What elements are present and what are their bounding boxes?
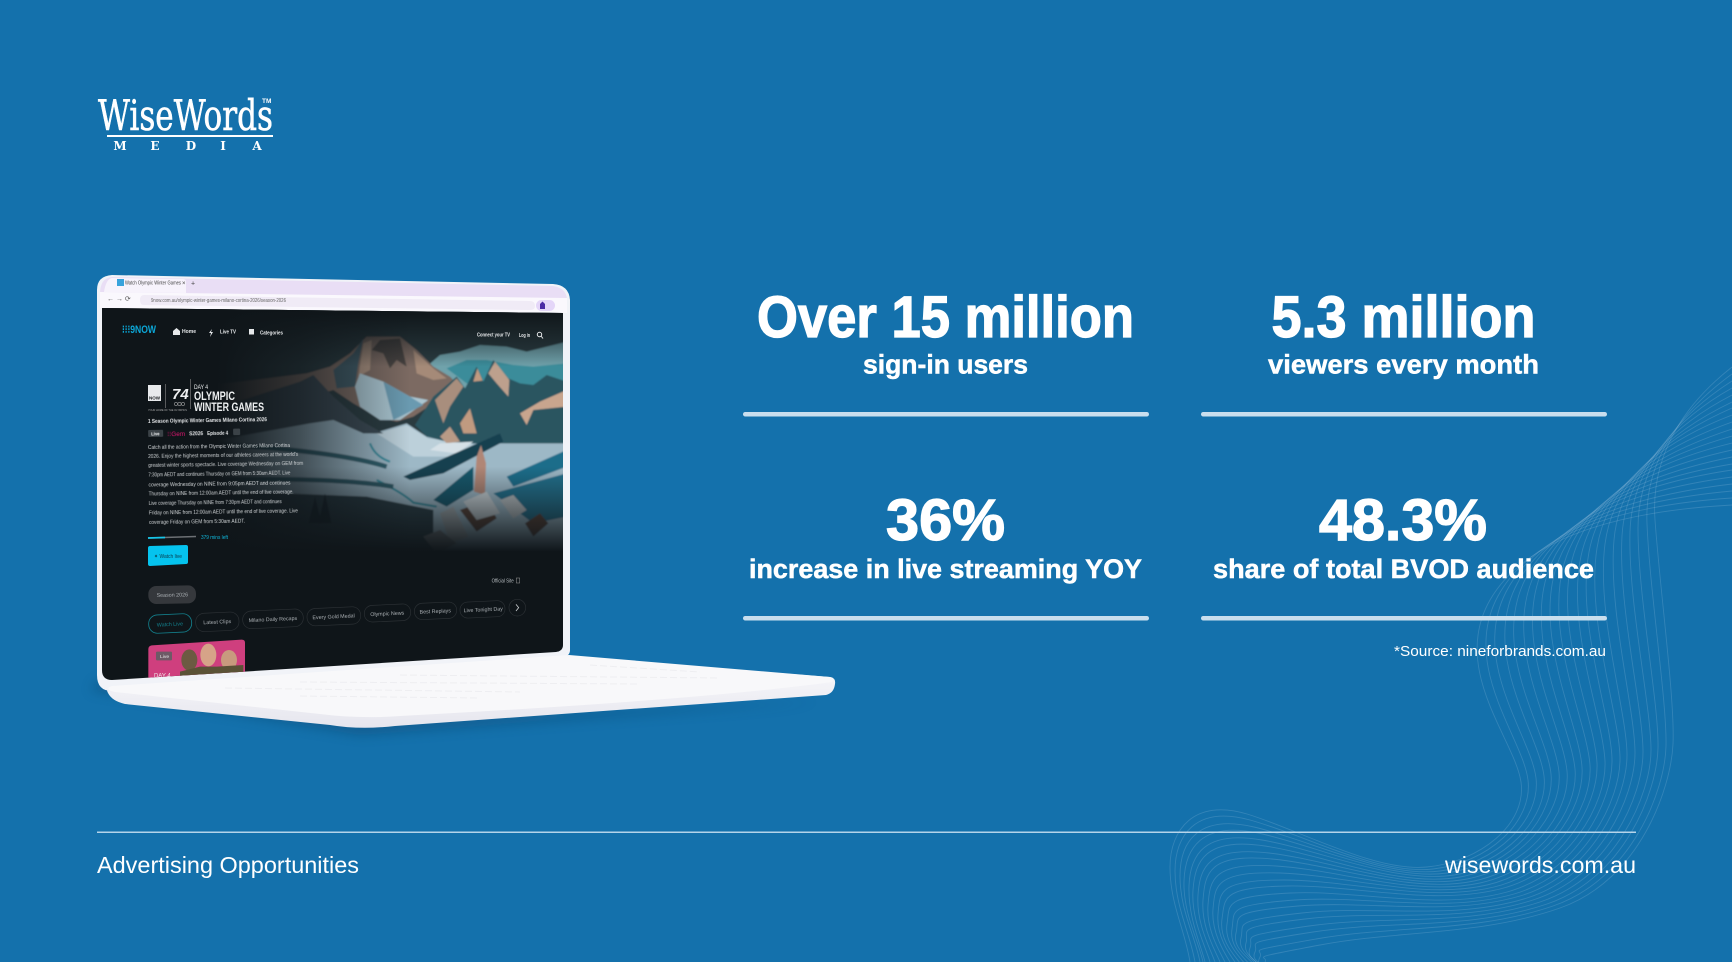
show description (148, 443, 304, 526)
streaming site navigation: ⁝⁝⁝9NOW (122, 324, 156, 336)
logo: WiseWords Media: WiseWords (98, 91, 273, 140)
stat: 36% increase in live streaming YOY: 36% (886, 488, 1005, 553)
stat: 36% increase in live streaming YOY (743, 488, 1149, 620)
Olympic Winter Games title block: DAY 4 (194, 384, 208, 391)
Olympic Winter Games title block: OLYMPIC (194, 389, 235, 403)
logo: WiseWords Media: TM (262, 98, 271, 105)
video thumbnail card (148, 640, 246, 678)
browser chrome: ← → ⟳ (107, 296, 131, 303)
logo: WiseWords Media: D (186, 139, 196, 153)
Olympic Winter Games title block: NOW (149, 396, 161, 400)
season and category tabs (148, 578, 526, 634)
stat: over 15 million sign-in users (743, 285, 1149, 416)
Olympic Winter Games title block: 74 (172, 386, 189, 403)
Olympic Winter Games title block: WINTER GAMES (194, 402, 264, 414)
stat: over 15 million sign-in users: Over 15 million (757, 285, 1134, 350)
watch live button: ✦ Watch live (154, 553, 182, 560)
logo: WiseWords Media: E (150, 139, 160, 153)
footer: wisewords.com.au (1444, 852, 1636, 878)
show metadata: S2026 (189, 431, 203, 437)
streaming site navigation: Connect your TV (477, 332, 510, 338)
stat: 48.3% share of total BVOD audience (1201, 488, 1607, 620)
season and category tabs: Live Tonight Day (464, 606, 503, 614)
logo: WiseWords Media (98, 91, 273, 153)
Olympic Winter Games title block (148, 379, 264, 414)
footer (97, 832, 1636, 878)
streaming site navigation: Live TV (220, 330, 236, 336)
season and category tabs: Watch Live (157, 621, 183, 629)
decorative wave line pattern (1170, 367, 1732, 962)
browser chrome: 9now.com.au/olympic-winter-games-milano-cortina-2026/season-2026 (151, 298, 286, 304)
laptop shadow (90, 680, 820, 735)
season and category tabs: Season 2026 (157, 592, 188, 599)
footer: Advertising Opportunities (97, 852, 359, 878)
show description: 2026. Enjoy the highest moments of our athletes careers at the world's (148, 452, 298, 460)
watch live button (148, 545, 188, 566)
source note: *Source: nineforbrands.com.au (1394, 643, 1606, 660)
show metadata (148, 417, 267, 438)
logo: WiseWords Media: I (220, 139, 226, 153)
show metadata: Live (151, 431, 160, 436)
show description: greatest winter sports spectacle. Live coverage Wednesday on GEM from (148, 461, 304, 469)
season and category tabs: Every Gold Medal (312, 613, 355, 621)
show description: coverage Wednesday on NINE from 9:05pm AEDT and continues (148, 481, 291, 488)
video thumbnail card: DAY 4 (154, 673, 171, 679)
stat: over 15 million sign-in users: sign-in users (863, 350, 1028, 380)
progress bar (148, 535, 228, 539)
show metadata: 1 Season Olympic Winter Games Milano Cortina 2026 (148, 417, 267, 425)
progress bar: 379 mins left (201, 535, 228, 541)
show description: Catch all the action from the Olympic Winter Games Milano Cortina (148, 443, 291, 451)
show metadata: ⁝⁝Gem (167, 431, 185, 438)
browser chrome: × (182, 281, 186, 287)
screen content (100, 300, 570, 690)
season and category tabs: Official Site (492, 579, 514, 585)
browser chrome: + (191, 280, 195, 288)
show description: coverage Friday on GEM from 5:30am AEDT. (149, 519, 245, 526)
browser chrome (100, 277, 567, 313)
stat: 48.3% share of total BVOD audience: share of total BVOD audience (1213, 554, 1594, 584)
logo: WiseWords Media: M (113, 139, 127, 153)
hero image: alpine mountains (104, 308, 563, 548)
stat: 5.3 million viewers every month (1201, 285, 1607, 416)
streaming site navigation: Log in (519, 333, 530, 339)
Olympic Winter Games title block: YOUR HOME OF THE OLYMPICS (148, 408, 187, 412)
laptop mockup (90, 275, 835, 735)
stat: 5.3 million viewers every month: 5.3 million (1272, 285, 1536, 350)
season and category tabs: Latest Clips (203, 619, 232, 626)
show description: Live coverage Thursday on NINE from 7:30pm AEDT and continues (149, 499, 282, 507)
show metadata: Episode 4 (207, 431, 228, 437)
laptop lid and bezel (97, 275, 570, 691)
season and category tabs: Best Replays (419, 608, 451, 616)
season and category tabs: Olympic News (370, 611, 405, 618)
season and category tabs: Milano Daily Recaps (249, 616, 298, 624)
stat: 5.3 million viewers every month: viewers every month (1268, 350, 1539, 380)
streaming site navigation: Home (182, 329, 196, 335)
browser chrome: Watch Olympic Winter Games (125, 280, 181, 286)
streaming site navigation (122, 326, 544, 339)
video thumbnail card: Live (160, 654, 169, 660)
logo: WiseWords Media: A (251, 139, 262, 153)
stat: 36% increase in live streaming YOY: increase in live streaming YOY (749, 554, 1142, 584)
show description: 7:30pm AEDT and continues Thursday on GEM from 5:30am AEDT. Live (148, 471, 290, 478)
laptop keyboard base (107, 655, 835, 728)
show description: Friday on NINE from 12:00am AEDT until the end of live coverage. Live (149, 508, 298, 516)
show description: Thursday on NINE from 12:00am AEDT until the end of live coverage. (149, 489, 294, 497)
stat: 48.3% share of total BVOD audience: 48.3% (1319, 488, 1487, 553)
streaming site navigation: Categories (260, 330, 283, 336)
